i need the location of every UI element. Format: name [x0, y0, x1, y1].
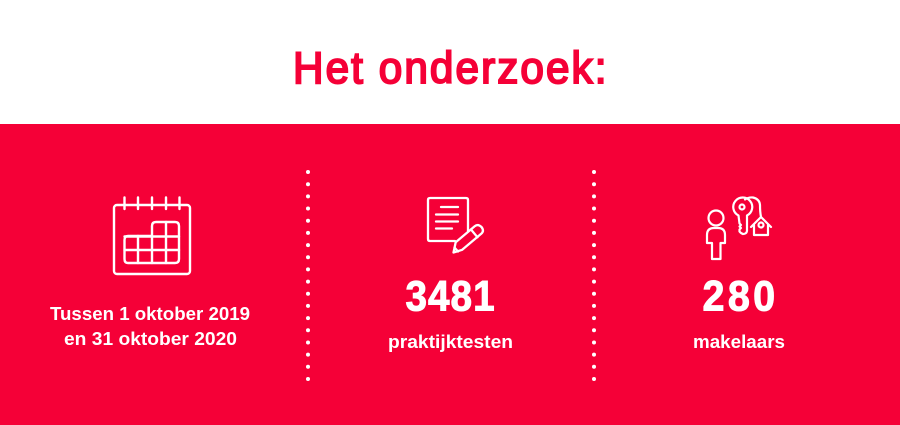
- label: makelaars: makelaars: [693, 331, 785, 352]
- title: Het onderzoek:: [293, 44, 607, 93]
- date text: en 31 oktober 2020: [64, 328, 237, 349]
- stat: 280: 280: [702, 272, 775, 320]
- icon: person with key and house: [707, 197, 771, 259]
- date text: [50, 303, 250, 349]
- stat: 3481: 3481: [406, 272, 495, 320]
- divider: left dotted line: [306, 170, 310, 381]
- icon: document with pencil: [428, 198, 483, 252]
- label: praktijktesten: praktijktesten: [388, 331, 513, 352]
- divider: right dotted line: [592, 170, 596, 381]
- date text: Tussen 1 oktober 2019: [50, 303, 250, 324]
- icon: calendar: [114, 198, 190, 274]
- panel: red band: [0, 124, 900, 425]
